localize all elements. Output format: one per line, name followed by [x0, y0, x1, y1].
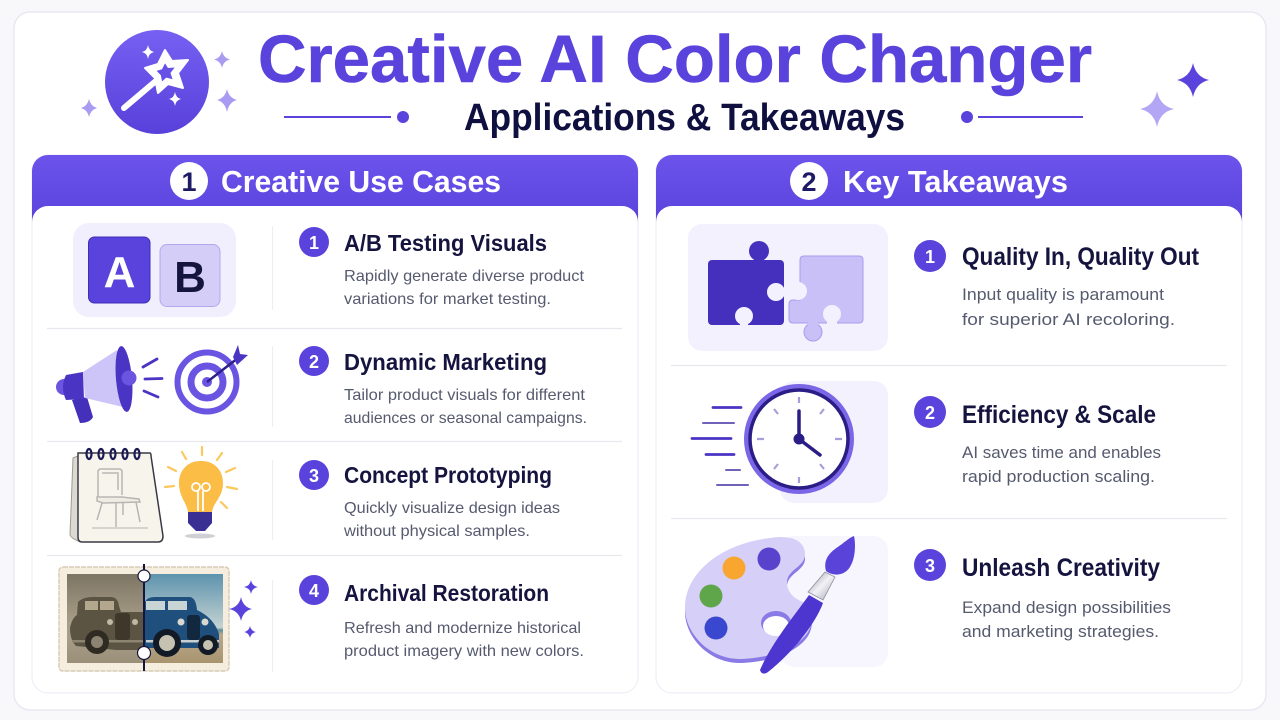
takeaway 1 text: Quality In, Quality Out — [962, 243, 1200, 271]
use case 1 text: Rapidly generate diverse product — [344, 268, 585, 285]
icon: paint palette and brush — [685, 536, 888, 674]
panel frame — [656, 155, 1242, 693]
section number 2: 2 — [801, 167, 817, 197]
subtitle ornament left — [284, 111, 409, 123]
use case 4 text: Refresh and modernize historical — [344, 620, 581, 637]
section heading: Key Takeaways — [843, 164, 1068, 199]
icon: puzzle pieces — [688, 224, 888, 351]
icon: restored car photo comparison — [59, 564, 229, 671]
use case 2 text: 2 — [309, 352, 319, 372]
use case 1 text: A/B Testing Visuals — [344, 230, 547, 256]
panel header band — [656, 155, 1242, 222]
use case 3 text: Concept Prototyping — [344, 462, 552, 488]
subtitle ornament right — [961, 111, 1083, 123]
panel: creative use cases — [32, 155, 638, 693]
icon: A/B test: B — [174, 253, 206, 302]
use case 4 text: product imagery with new colors. — [344, 643, 584, 660]
takeaway 2 text — [914, 396, 1161, 486]
section heading: Creative Use Cases — [221, 164, 501, 199]
icon: A/B test — [73, 223, 236, 317]
use case 1 text: variations for market testing. — [344, 291, 551, 308]
takeaway 3 text: Expand design possibilities — [962, 598, 1171, 617]
use case 4 text: 4 — [309, 581, 319, 601]
takeaway 1 text: Input quality is paramount — [962, 285, 1164, 304]
icon: header sparkles right — [1140, 63, 1209, 127]
section number 2 — [790, 162, 828, 200]
takeaway 3 text: 3 — [925, 556, 935, 576]
use case 3 text — [299, 460, 560, 540]
panel: key takeaways — [656, 155, 1242, 693]
panel header band — [32, 155, 638, 222]
use case 3 text: 3 — [309, 466, 319, 486]
takeaway 2 text: rapid production scaling. — [962, 467, 1155, 486]
section number 1: 1 — [181, 167, 197, 197]
use case 2 text: audiences or seasonal campaigns. — [344, 410, 587, 427]
takeaway 2 text: Efficiency & Scale — [962, 401, 1156, 429]
icon: sketchpad with chair — [70, 449, 163, 542]
icon: megaphone and target — [56, 345, 248, 423]
takeaway 2 text: AI saves time and enables — [962, 443, 1161, 462]
takeaway 1 text: 1 — [925, 247, 935, 267]
use case 3 text: without physical samples. — [343, 523, 530, 540]
title: Creative AI Color Changer — [258, 22, 1092, 97]
use case 4 text: Archival Restoration — [344, 580, 549, 606]
takeaway 2 text: 2 — [925, 403, 935, 423]
section number 1 — [170, 162, 208, 200]
use case 1 text — [299, 227, 585, 308]
panel frame — [32, 155, 638, 693]
icon: sparkles beside photo — [229, 580, 258, 638]
use case 2 text: Dynamic Marketing — [344, 349, 547, 375]
use case 2 text — [299, 346, 587, 427]
takeaway 1 text: for superior AI recoloring. — [962, 310, 1175, 329]
takeaway 3 text: Unleash Creativity — [962, 554, 1160, 582]
use case 1 text: 1 — [309, 233, 319, 253]
takeaway 3 text: and marketing strategies. — [962, 622, 1159, 641]
takeaway 3 text — [914, 549, 1171, 641]
use case 3 text: Quickly visualize design ideas — [344, 500, 560, 517]
use case 2 text: Tailor product visuals for different — [344, 387, 586, 404]
icon: light bulb — [165, 447, 237, 538]
icon: fast clock — [692, 381, 888, 503]
subtitle: Applications & Takeaways — [464, 97, 905, 139]
use case 4 text — [299, 575, 584, 660]
takeaway 1 text — [914, 240, 1200, 329]
icon: A/B test: A — [104, 248, 135, 297]
icon: magic wand badge — [105, 30, 209, 134]
icon: header sparkles left — [81, 51, 237, 117]
